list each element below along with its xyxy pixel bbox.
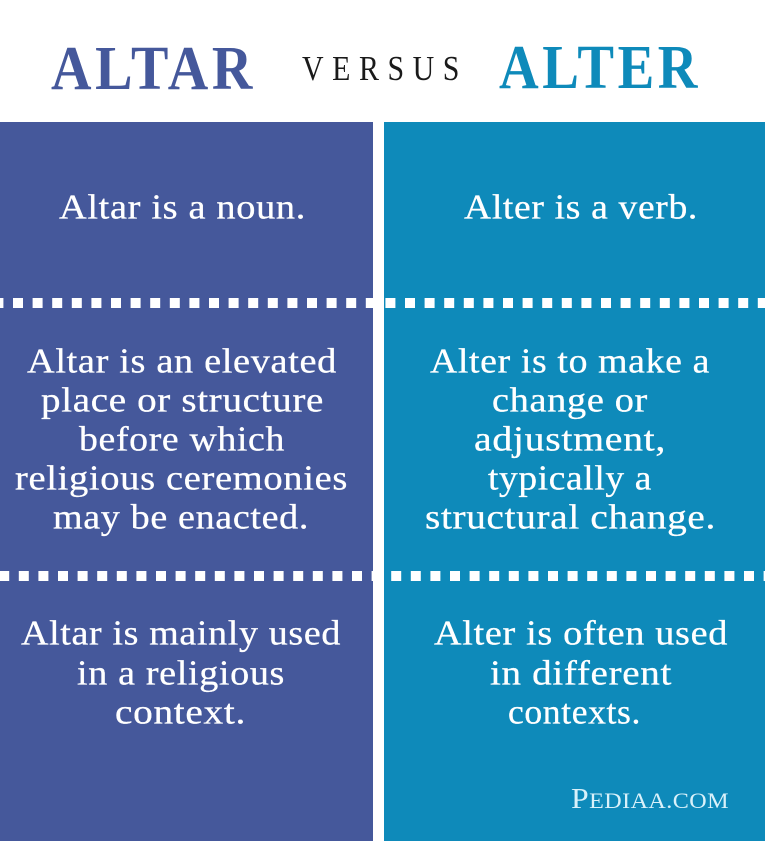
text: alter part of speech: Alter is a verb.: [464, 188, 698, 226]
text: alter definition: change or: [492, 380, 648, 420]
text: alter definition: adjustment,: [474, 420, 666, 458]
text: altar definition: before which: [79, 420, 285, 458]
text: alter usage: in different: [490, 654, 672, 692]
text: altar usage: Altar is mainly used: [21, 614, 341, 652]
text: altar part of speech: Altar is a noun.: [59, 188, 306, 226]
panel: altar column background: [0, 122, 373, 841]
text: alter definition: Alter is to make a: [430, 342, 710, 380]
text: altar usage: in a religious: [77, 654, 285, 692]
dotted divider: second row: [0, 571, 765, 581]
text: alter usage: Alter is often used: [434, 614, 728, 652]
text: altar definition: Altar is an elevated: [27, 342, 337, 380]
text: altar usage: context.: [115, 692, 246, 732]
heading: versus: VERSUS: [302, 49, 468, 88]
text: alter usage: [434, 614, 728, 732]
text: altar definition: may be enacted.: [53, 498, 309, 536]
text: alter definition: [425, 342, 716, 536]
panel: alter column background: [384, 122, 765, 841]
brand: pediaa.com: PEDIAA.COM: [571, 783, 729, 815]
dotted divider: first row: [0, 298, 765, 308]
text: alter usage: contexts.: [508, 692, 641, 732]
heading: alter: ALTER: [499, 34, 701, 102]
text: alter definition: structural change.: [425, 498, 716, 536]
text: altar definition: [15, 342, 348, 536]
heading: altar: ALTAR: [51, 35, 256, 103]
text: alter definition: typically a: [488, 458, 652, 498]
text: altar usage: [21, 614, 341, 732]
text: altar definition: religious ceremonies: [15, 458, 348, 498]
text: altar definition: place or structure: [41, 380, 324, 420]
title: [51, 34, 701, 103]
